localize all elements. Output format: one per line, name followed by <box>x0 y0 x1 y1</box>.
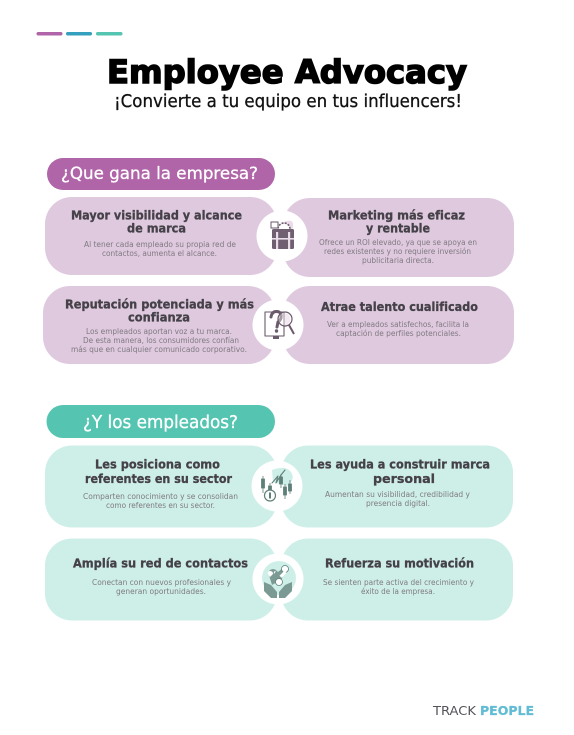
card: referentes: Les posiciona como <box>95 458 220 472</box>
card: marketing eficaz: publicitaria directa. <box>362 256 434 265</box>
card: reputación: De esta manera, los consumidores confían <box>83 336 239 345</box>
logo: PEOPLE <box>480 703 534 718</box>
card: mayor visibilidad: contactos, aumenta el alcance. <box>102 249 217 258</box>
card: red de contactos: Conectan con nuevos profesionales y <box>92 578 231 587</box>
card: motivación <box>281 538 513 620</box>
icon: briefcase with gear <box>256 210 308 262</box>
icon: hands holding heart <box>252 554 304 604</box>
card: reputación: Los empleados aportan voz a tu marca. <box>86 327 232 336</box>
card: reputación: Reputación potenciada y más <box>65 298 254 312</box>
logo <box>432 703 534 718</box>
card: referentes: Comparten conocimiento y se consolidan <box>83 492 238 501</box>
card: marca personal: Aumentan su visibilidad, credibilidad y <box>325 490 470 499</box>
card: referentes <box>45 446 277 528</box>
card: marketing eficaz <box>283 198 514 277</box>
icon: question mark and magnifier <box>252 300 304 350</box>
card: atrae talento: Atrae talento cualificado <box>321 300 478 314</box>
card: marketing eficaz: Marketing más eficaz <box>328 208 465 222</box>
card: mayor visibilidad: Al tener cada empleado su propia red de <box>84 240 236 249</box>
card: marca personal <box>281 446 513 528</box>
logo: TRACK <box>432 703 477 718</box>
heading pill: employees: ¿Y los empleados? <box>83 412 238 433</box>
heading pill: company: ¿Que gana la empresa? <box>61 164 258 184</box>
card: red de contactos <box>45 538 277 620</box>
card: atrae talento: captación de perfiles potenciales. <box>336 328 461 338</box>
card: reputación: confianza <box>128 310 190 324</box>
card: motivación: Refuerza su motivación <box>325 556 474 570</box>
title: Employee Advocacy <box>107 53 467 91</box>
card: mayor visibilidad: de marca <box>127 222 186 236</box>
card: atrae talento: Ver a empleados satisfechos, facilita la <box>327 320 469 329</box>
card: red de contactos: Amplía su red de contactos <box>73 556 248 570</box>
card: motivación: éxito de la empresa. <box>361 586 435 596</box>
card: motivación: Se sienten parte activa del crecimiento y <box>323 578 474 587</box>
card: red de contactos: generan oportunidades. <box>116 587 206 596</box>
card: referentes: referentes en su sector <box>85 472 232 486</box>
card: marketing eficaz: Ofrece un ROI elevado, ya que se apoya en <box>319 238 477 247</box>
heading pill: company <box>47 158 275 190</box>
card: marketing eficaz: redes existentes y no requiere inversión <box>324 246 471 256</box>
heading pill: employees <box>46 405 275 438</box>
card: marca personal: presencia digital. <box>366 499 430 508</box>
card: mayor visibilidad: Mayor visibilidad y alcance <box>71 208 242 222</box>
card: reputación: más que en cualquier comunicado corporativo. <box>71 345 247 354</box>
card: marca personal: personal <box>373 472 435 486</box>
card: mayor visibilidad <box>45 197 277 275</box>
icon: candlesticks with coin <box>252 460 302 512</box>
decorative colour bars <box>36 32 122 36</box>
card: atrae talento <box>283 286 514 364</box>
card: marca personal: Les ayuda a construir marca <box>310 458 490 472</box>
card: referentes: como referentes en su sector. <box>106 501 215 510</box>
subtitle: ¡Convierte a tu equipo en tus influencers! <box>114 92 462 112</box>
card: marketing eficaz: y rentable <box>366 222 430 236</box>
card: reputación <box>43 286 275 364</box>
